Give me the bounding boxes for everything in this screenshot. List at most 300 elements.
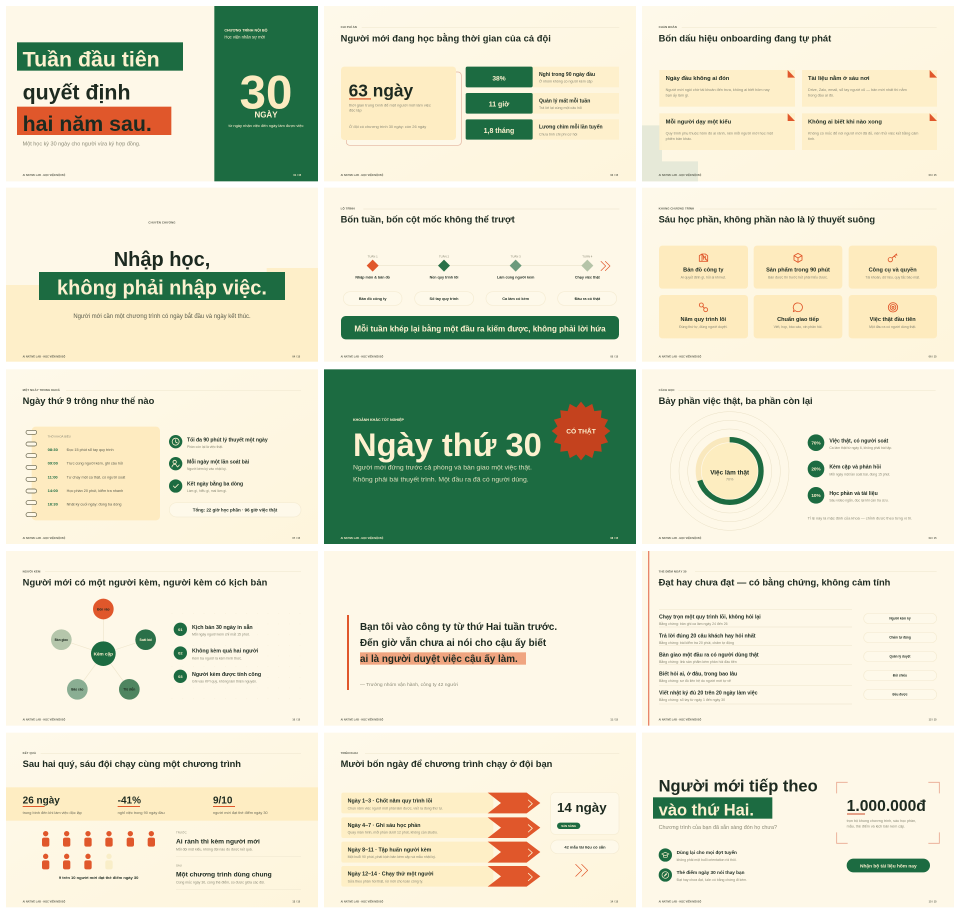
stat card: SẴN SÀNG <box>561 823 577 828</box>
stat row 2: Quản lý mất mỗi tuần <box>539 97 590 104</box>
card: scattered docs: Drive, Zalo, email, sổ tay người cũ — bản mới nhất thì nằm <box>808 87 907 92</box>
hub diagram: Đón vào <box>97 607 110 611</box>
stat row 1 <box>466 67 619 87</box>
benefit 2: Thẻ điểm ngày 30 nói thay bạn <box>677 869 745 875</box>
rule 2: Người kèm ký vào nhật ký. <box>187 467 227 471</box>
heading: Người mới có một người kèm, người kèm có kịch bản <box>23 578 268 588</box>
heading <box>23 568 301 588</box>
headline: vào thứ Hai. <box>659 801 754 819</box>
price frame <box>837 782 939 843</box>
heading: TRIỂN KHAI <box>341 750 358 755</box>
heading: Sau hai quý, sáu đội chạy cùng một chương trình <box>23 759 241 769</box>
slide 15: call to action <box>642 733 954 907</box>
after <box>176 864 301 889</box>
card: no welcome: bạn ấy làm gì. <box>666 94 689 98</box>
slide 14: rollout <box>324 733 636 907</box>
card: no welcome: Ngày đầu không ai đón <box>666 76 730 82</box>
criteria list: Trả lời đúng 20 câu khách hay hỏi nhất <box>659 632 756 639</box>
heading: CHI PHÍ ẨN <box>341 24 357 29</box>
timeline <box>355 254 601 280</box>
criteria list: Bằng chứng: bài kiểm tra 20 phút, chấm tự động <box>659 640 734 645</box>
card: everyone teaches differently: Mỗi người dạy một kiểu <box>666 118 732 125</box>
step 1: Chọn năm việc người mới phải làm được, viết ra đúng thứ tự. <box>348 806 443 810</box>
headline: Nhập học, <box>114 249 210 271</box>
hub diagram: Thị diễn <box>123 688 135 692</box>
criteria list <box>659 610 852 704</box>
footer: 06 / 15 <box>929 355 937 358</box>
big stat card: 63 ngày <box>349 81 414 101</box>
point 02 <box>174 646 259 660</box>
notebook schedule: Đọc 15 phút sổ tay quy trình <box>67 448 114 452</box>
output pills: Bản đồ công ty <box>359 297 387 301</box>
before: Mỗi đội một kiểu, không đội nào đo được kết quả. <box>176 847 253 852</box>
badge: starburst: CÓ THẬT <box>566 426 596 435</box>
footer: 08 / 15 <box>610 537 619 540</box>
notebook schedule: Tự chạy một ca thật, có người soát <box>67 475 126 479</box>
total pill <box>169 503 301 517</box>
slide 3: four signs <box>642 6 954 181</box>
heading: KẾT QUẢ <box>23 750 36 755</box>
heading: Sáu học phần, không phần nào là lý thuyết suông <box>659 215 875 225</box>
big stat card: thời gian trung bình để một người mới làm việc <box>349 102 431 107</box>
timeline: Nền quy trình lõi <box>430 276 458 280</box>
heading: THẺ ĐIỂM NGÀY 30 <box>659 568 687 573</box>
footer: AI NATIVE LAB · HỌC VIỆN NỘI BỘ <box>341 174 383 177</box>
footer: 05 / 15 <box>610 355 619 358</box>
pictogram: 9 trên 10 người mới đạt thẻ điểm ngày 30 <box>59 875 139 880</box>
output pills: Sổ tay quy trình <box>430 297 459 301</box>
module 3: Công cụ và quyền <box>869 268 917 274</box>
eyebrow: KHOẢNH KHẮC TỐT NGHIỆP <box>353 417 405 422</box>
point 02: 02 <box>178 651 183 656</box>
quote: Bạn tôi vào công ty từ thứ Hai tuần trước. <box>360 622 557 633</box>
big number: 30 <box>240 66 292 119</box>
quote: ai là người duyệt việc cậu ấy làm. <box>360 654 518 665</box>
module 5: Chuẩn giao tiếp <box>777 316 820 323</box>
templates pill: 42 mẫu tài liệu có sẵn <box>564 845 606 850</box>
heading: Bốn dấu hiệu onboarding đang tự phát <box>659 33 831 43</box>
footer: 04 / 15 <box>292 355 301 358</box>
footer: AI NATIVE LAB · HỌC VIỆN NỘI BỘ <box>341 355 383 358</box>
stat band: 26 ngày <box>23 796 60 807</box>
footer: AI NATIVE LAB · HỌC VIỆN NỘI BỘ <box>341 900 383 903</box>
heading: Ngày thứ 9 trông như thế nào <box>23 396 155 406</box>
benefit 2: Đạt hay chưa đạt, luôn có bằng chứng đi kèm. <box>677 877 747 882</box>
footer: AI NATIVE LAB · HỌC VIỆN NỘI BỘ <box>659 174 701 177</box>
footer: AI NATIVE LAB · HỌC VIỆN NỘI BỘ <box>23 719 65 722</box>
benefit 1 <box>659 848 737 862</box>
pictogram <box>42 831 155 880</box>
heading: CÁCH HỌC <box>659 387 675 392</box>
footer <box>23 537 301 540</box>
point 03: 03 <box>178 674 183 679</box>
footer <box>341 900 619 903</box>
benefit 2 <box>659 868 747 882</box>
module 5: Viết, họp, báo cáo, xin phản hồi. <box>774 325 822 329</box>
footer: 14 / 15 <box>610 900 619 903</box>
footer: AI NATIVE LAB · HỌC VIỆN NỘI BỘ <box>23 355 65 358</box>
criteria list: Bàn giao một đầu ra có người dùng thật <box>659 652 759 658</box>
hub diagram: Báo cáo <box>71 688 84 692</box>
heading: Bảy phần việc thật, ba phần còn lại <box>659 396 813 406</box>
footer: 15 / 15 <box>929 900 937 903</box>
module 4 <box>659 295 748 338</box>
panel: 30 days: NGÀY <box>254 110 278 119</box>
module 3 <box>849 246 937 289</box>
step 2: Ngày 4–7 · Ghi sáu học phần <box>348 823 421 829</box>
legend 10: Sáu video ngắn, đọc lại khi cần tra cứu. <box>829 498 889 503</box>
price frame: mẫu, thẻ điểm và kịch bản kèm cặp. <box>847 823 905 828</box>
point 03: Ghi vào KPI quý, không làm thiện nguyện. <box>192 680 257 684</box>
headline <box>39 249 285 300</box>
panel: 30 days <box>214 6 318 181</box>
eyebrow: CHUYỂN CHƯƠNG <box>148 220 176 225</box>
module 4: Đúng thứ tự, đúng người duyệt. <box>679 325 728 329</box>
card: no welcome: Người mới ngồi chờ tài khoản đến trưa, không ai biết hôm nay <box>666 88 770 92</box>
slide 2: hidden cost <box>324 6 636 181</box>
slide 4: chapter divider <box>6 188 318 362</box>
stat row 3: Lương chìm mỗi lần tuyển <box>539 124 603 131</box>
heading: Người mới đang học bằng thời gian của cả đội <box>341 32 551 43</box>
footer <box>659 174 937 177</box>
point 01: Kịch bản 30 ngày in sẵn <box>192 624 253 631</box>
slide 10: mentor <box>6 551 318 726</box>
stat band: người mới đạt thẻ điểm ngày 30 <box>213 811 268 815</box>
timeline: TUẦN 3 <box>511 254 521 259</box>
body copy: Không phải bài thuyết trình. Một đầu ra đã có người dùng. <box>353 474 529 483</box>
footer <box>659 537 937 540</box>
title highlight block <box>17 42 183 136</box>
big stat card: độc lập <box>349 108 362 113</box>
step 3: Ngày 8–11 · Tập huấn người kèm <box>348 846 432 853</box>
price frame: trọn bộ khung chương trình, sáu học phần, <box>847 819 916 823</box>
total pill: Tổng: 22 giờ học phần · 96 giờ việc thật <box>193 507 278 513</box>
notebook schedule: THỜI KHOÁ BIỂU <box>48 434 71 439</box>
notebook rings <box>26 430 37 517</box>
heading: NGƯỜI KÈM <box>23 568 41 573</box>
output pills: Đầu ra có thật <box>575 297 601 301</box>
notebook schedule: Trực cùng người kèm, ghi câu hỏi <box>67 462 123 466</box>
attribution: — Trưởng nhóm vận hành, công ty 42 người <box>360 681 458 688</box>
title highlight block: hai năm sau. <box>23 112 152 136</box>
footer: AI NATIVE LAB · HỌC VIỆN NỘI BỘ <box>341 537 383 540</box>
stat row 2 <box>466 93 619 114</box>
heading <box>341 750 619 769</box>
headline: Ngày thứ 30 <box>353 426 542 463</box>
module 4: Năm quy trình lõi <box>681 317 727 323</box>
heading: LỘ TRÌNH <box>341 206 355 211</box>
stat band: 9/10 <box>213 796 233 807</box>
heading: Bốn tuần, bốn cột mốc không thể trượt <box>341 215 515 225</box>
footer: 12 / 15 <box>929 719 937 722</box>
legend 70: Việc thật, có người soát <box>829 439 888 445</box>
criteria list: Biết hỏi ai, ở đâu, trong bao lâu <box>659 670 737 677</box>
module 6 <box>849 295 937 338</box>
slide 7: day 9 <box>6 369 318 544</box>
card: no finish line <box>802 113 937 150</box>
output pills <box>343 292 617 305</box>
panel: 30 days: Học viện nhân sự mới <box>224 34 265 39</box>
quote bar <box>347 615 349 690</box>
footer: 10 / 15 <box>292 719 301 722</box>
after: Một chương trình dùng chung <box>176 872 272 879</box>
footer <box>23 900 301 903</box>
heading <box>659 206 937 225</box>
timeline: Làm cùng người kèm <box>497 276 535 280</box>
donut chart: 70% <box>726 478 734 482</box>
criteria list: Bằng chứng: sổ tay từ ngày 1 đến ngày 30 <box>659 697 725 702</box>
heading: CHẨN ĐOÁN <box>659 24 677 29</box>
notebook schedule: 11:00 <box>48 474 58 479</box>
heading <box>23 750 301 769</box>
module 1: Ai quyết định gì, hỏi ai khi kẹt. <box>681 276 726 280</box>
footer <box>659 355 937 358</box>
footer: AI NATIVE LAB · HỌC VIỆN NỘI BỘ <box>23 537 65 540</box>
takeaway banner: Mỗi tuần khép lại bằng một đầu ra kiếm được, không phải lời hứa <box>354 324 606 333</box>
footer: AI NATIVE LAB · HỌC VIỆN NỘI BỘ <box>23 174 65 177</box>
footer: 07 / 15 <box>292 537 301 540</box>
hub diagram: Soát bài <box>140 638 152 642</box>
benefit 1: không phải một buổi orientation rồi thôi. <box>677 858 737 862</box>
footer: AI NATIVE LAB · HỌC VIỆN NỘI BỘ <box>23 900 65 903</box>
legend 20: 20% <box>811 467 822 472</box>
module 1 <box>659 246 748 289</box>
legend 10: 10% <box>811 493 822 498</box>
footer: AI NATIVE LAB · HỌC VIỆN NỘI BỘ <box>659 719 701 722</box>
step 3 <box>341 842 540 863</box>
step 2 <box>341 817 540 838</box>
badge: starburst <box>552 402 610 460</box>
module 5 <box>754 295 842 338</box>
notebook schedule: Học phần 20 phút, kiểm tra nhanh <box>67 489 123 493</box>
notebook schedule: 14:00 <box>48 488 59 493</box>
subtitle: Chương trình của bạn đã sẵn sàng đón họ chưa? <box>659 824 777 831</box>
module 1: Bản đồ công ty <box>683 268 724 274</box>
legend 20 <box>808 461 890 477</box>
slide 9: 70-20-10 <box>642 369 954 544</box>
module 2 <box>754 246 842 289</box>
step 4 <box>341 866 540 887</box>
stat card <box>551 792 619 834</box>
heading: KHUNG CHƯƠNG TRÌNH <box>659 206 694 211</box>
footer: 03 / 15 <box>929 174 937 177</box>
legend 70: 70% <box>811 440 822 445</box>
heading <box>659 24 937 43</box>
card: everyone teaches differently: Quy trình phụ thuộc hôm đó ai rảnh, nên mỗi người mới học một <box>666 130 774 135</box>
after: SAU <box>176 864 182 868</box>
hub diagram <box>51 599 156 700</box>
slide 1: cover <box>6 6 318 181</box>
card: scattered docs: Tài liệu nằm ở sáu nơi <box>808 75 870 82</box>
legend 20: Kèm cặp và phản hồi <box>829 465 881 471</box>
slide 11: quote <box>324 551 636 726</box>
module 2: Sản phẩm trong 90 phút <box>766 267 830 274</box>
footer: AI NATIVE LAB · HỌC VIỆN NỘI BỘ <box>659 900 701 903</box>
verifier pills: Người kèm ký <box>889 617 911 621</box>
panel: 30 days: từ ngày nhận việc đến ngày làm được việc <box>229 123 303 128</box>
heading: Đạt hay chưa đạt — có bằng chứng, không cảm tính <box>659 577 891 588</box>
stat row 2: 11 giờ <box>489 102 509 109</box>
step 1 <box>341 793 540 813</box>
card: scattered docs <box>802 70 937 107</box>
benefit 1: Dùng lại cho mọi đợt tuyển <box>677 849 737 855</box>
body copy: Người mới đứng trước cả phòng và bàn giao một việc thật. <box>353 464 532 471</box>
footer: 09 / 15 <box>929 537 937 540</box>
card: everyone teaches differently: phiên bản khác. <box>666 137 692 141</box>
point 01 <box>174 623 253 637</box>
notebook schedule: 16:30 <box>48 502 59 507</box>
arrow <box>576 864 588 876</box>
card: no welcome <box>659 70 795 107</box>
stat row 1: 38% <box>492 75 506 82</box>
templates pill <box>551 840 619 854</box>
button <box>847 859 930 872</box>
step 3: Một buổi 90 phút, phát kịch bản kèm cặp và mẫu nhật ký. <box>348 854 436 859</box>
stat row 3: 1,8 tháng <box>484 128 514 135</box>
step 1: Ngày 1–3 · Chốt năm quy trình lõi <box>348 798 433 805</box>
footer <box>23 719 301 722</box>
headline <box>653 777 818 819</box>
verifier pills: Đối chiếu <box>893 674 907 678</box>
point 01: Mỗi ngày người kèm chỉ mất 15 phút. <box>192 632 250 637</box>
legend 10: Học phần và tài liệu <box>829 491 878 497</box>
point 02: Không kèm quá hai người <box>192 649 259 655</box>
notebook schedule: 09:00 <box>48 461 59 466</box>
button: Nhận bộ tài liệu hôm nay <box>860 863 917 869</box>
donut chart <box>670 412 789 530</box>
timeline: Nhập môn & bản đồ <box>355 276 391 280</box>
big stat card <box>341 67 461 145</box>
output pills: Ca làm có kèm <box>502 297 530 301</box>
point 02: Kèm ba người là kèm hình thức. <box>192 656 242 660</box>
stat card: 14 ngày <box>557 800 607 815</box>
accent bar <box>648 551 649 726</box>
step 4: Sửa theo phản hồi thật, rồi mới cho toàn công ty. <box>348 879 423 883</box>
criteria list: Bằng chứng: link sản phẩm kèm phản hồi đầu tiên <box>659 659 737 664</box>
rule 1: Phần còn lại là việc thật. <box>187 445 223 449</box>
point 03 <box>174 670 261 684</box>
footer: 13 / 15 <box>292 900 301 903</box>
takeaway banner <box>341 316 619 339</box>
rule 2: Mỗi ngày một lần soát bài <box>187 458 250 465</box>
timeline: TUẦN 2 <box>439 254 449 259</box>
legend 10 <box>808 487 889 504</box>
footer <box>23 355 301 358</box>
notebook schedule: Nhật ký cuối ngày: đúng ba dòng <box>67 503 122 507</box>
quote: Đến giờ vẫn chưa ai nói cho cậu ấy biết <box>360 638 547 649</box>
subtitle: Một học kỳ 30 ngày cho người vừa ký hợp đồng. <box>23 141 141 147</box>
stat band: -41% <box>118 796 141 807</box>
point 01: 01 <box>178 627 183 632</box>
verifier pills <box>864 613 937 700</box>
card: no finish line: Không ai biết khi nào xong <box>808 118 882 125</box>
footer <box>341 537 619 540</box>
notebook schedule <box>26 427 160 520</box>
card: everyone teaches differently <box>659 113 795 150</box>
footer <box>341 174 619 177</box>
notebook schedule: 08:30 <box>48 447 59 452</box>
card: scattered docs: trong đầu ai đó. <box>808 94 834 98</box>
hub diagram: Kèm cặp <box>94 651 113 656</box>
module 3: Tài khoản, dữ liệu, quy tắc bảo mật. <box>865 275 920 280</box>
stat row 1: Nghỉ trong 90 ngày đầu <box>539 72 595 78</box>
slide 8: day 30 <box>324 369 636 544</box>
rule 1: Tối đa 90 phút lý thuyết một ngày <box>187 436 268 443</box>
timeline: Chạy việc thật <box>575 276 601 280</box>
heading <box>659 568 937 588</box>
footer: AI NATIVE LAB · HỌC VIỆN NỘI BỘ <box>659 537 701 540</box>
hub diagram: Bàn giao <box>55 638 68 642</box>
heading <box>341 24 619 43</box>
card: no finish line: Không có mốc để nói người mới đã đủ, nên thử việc kết bằng cảm <box>808 130 918 135</box>
stat band <box>6 787 318 821</box>
stat row 2: Trả lời lại cùng một câu hỏi <box>539 106 582 110</box>
headline: không phải nhập việc. <box>57 277 267 299</box>
rule 2 <box>169 457 250 471</box>
stat row 3: Chưa tính chi phí cơ hội <box>539 132 578 136</box>
panel: 30 days: CHƯƠNG TRÌNH NỘI BỘ <box>224 27 268 32</box>
rule 3: Làm gì, hiểu gì, mai làm gì. <box>187 489 227 493</box>
card: no finish line: tính. <box>808 137 815 141</box>
footer <box>659 900 937 903</box>
before: Ai rảnh thì kèm người mới <box>176 839 260 846</box>
step 2: Quay màn hình, mỗi phần dưới 12 phút, không cần studio. <box>348 830 438 835</box>
stat band: nghỉ việc trong 90 ngày đầu <box>118 811 165 815</box>
criteria list: Bằng chứng: bản ghi ca làm ngày 24 đến 26 <box>659 621 728 626</box>
verifier pills: Chấm tự động <box>889 636 911 640</box>
heading <box>341 206 619 225</box>
module 6: Một đầu ra có người dùng thật. <box>869 325 916 329</box>
point 03: Người kèm được tính công <box>192 672 261 678</box>
after: Cùng mốc ngày 30, cùng thẻ điểm, so được giữa các đội. <box>176 881 265 885</box>
title highlight block: Tuần đầu tiên <box>23 48 160 72</box>
heading <box>659 387 936 406</box>
footer <box>659 719 937 722</box>
heading <box>23 387 301 406</box>
legend 70 <box>808 434 892 451</box>
rule 3: Kết ngày bằng ba dòng <box>187 480 243 487</box>
title highlight block: quyết định <box>23 80 130 104</box>
footer <box>341 719 619 722</box>
note: Tỉ lệ này là mặc định của khoá — chỉnh được theo từng vị trí. <box>808 517 912 521</box>
heading: Mười bốn ngày để chương trình chạy ở đội bạn <box>341 759 553 769</box>
before: TRƯỚC <box>176 830 187 835</box>
verifier pills: Quản lý duyệt <box>890 655 911 659</box>
donut chart: Việc làm thật <box>710 469 750 476</box>
footer: 11 / 15 <box>610 719 619 722</box>
module 6: Việc thật đầu tiên <box>870 317 916 323</box>
panel: 30 days: 01 / 15 <box>293 174 302 177</box>
timeline: TUẦN 4 <box>582 254 593 259</box>
timeline: TUẦN 1 <box>368 254 378 259</box>
step 4: Ngày 12–14 · Chạy thử một người <box>348 872 434 878</box>
heading: MỘT NGÀY TRONG KHOÁ <box>23 387 60 392</box>
verifier pills: Đều được <box>892 693 908 697</box>
slide 5: roadmap <box>324 188 636 362</box>
slide 13: results <box>6 733 318 907</box>
price frame: 1.000.000đ <box>847 798 926 815</box>
rule 1 <box>169 435 268 449</box>
slide 12: scorecard <box>642 551 954 726</box>
footer: 02 / 15 <box>610 174 619 177</box>
criteria list: Bằng chứng: sơ đồ liên hệ do người mới tự vẽ <box>659 678 731 683</box>
footer: AI NATIVE LAB · HỌC VIỆN NỘI BỘ <box>341 719 383 722</box>
subtitle: Người mới cần một chương trình có ngày bắt đầu và ngày kết thúc. <box>73 313 251 320</box>
legend 70: Ca làm thật từ ngày 6, không phải bài tập. <box>829 446 892 450</box>
stat row 3 <box>466 119 619 140</box>
footer <box>341 355 619 358</box>
rule 3 <box>169 479 243 493</box>
